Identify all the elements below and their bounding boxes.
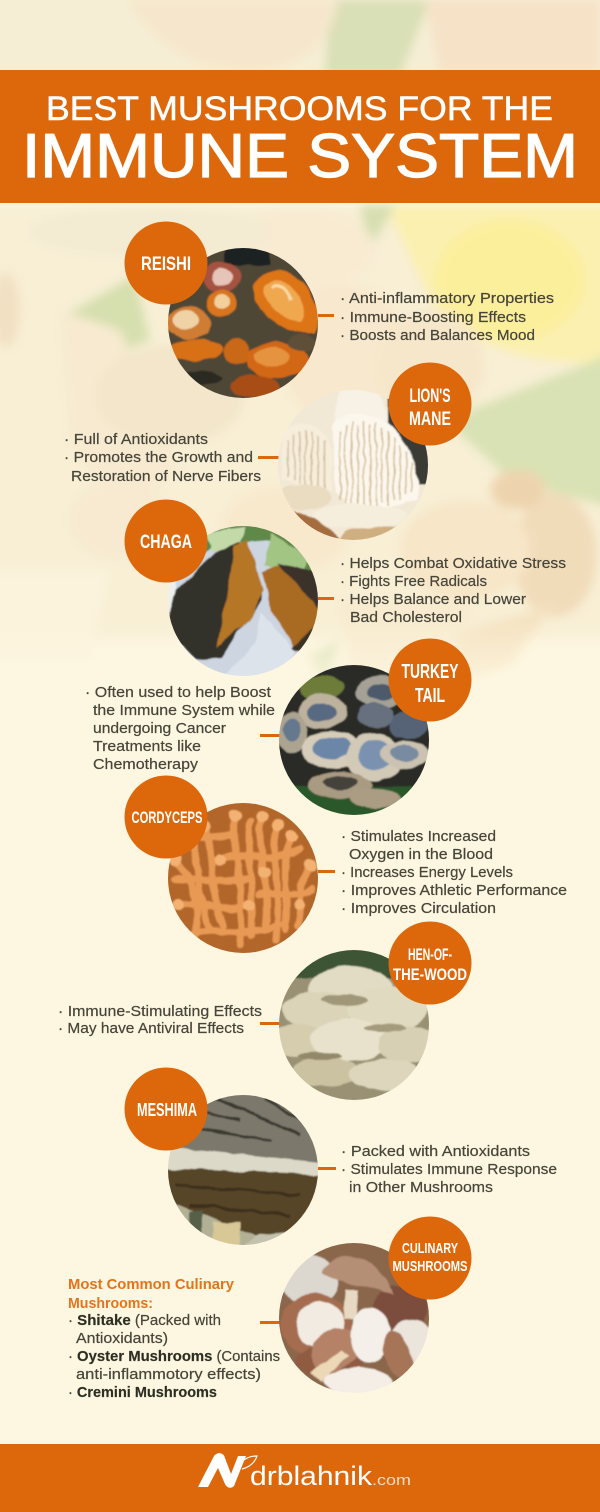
text: Turkey Tail benefits: undergoing Cancer <box>93 721 226 737</box>
photo: chaga <box>168 526 318 676</box>
label badge: Turkey Tail: TAIL <box>415 685 445 707</box>
label badge: Hen-of-the-Wood: HEN-OF- <box>408 945 452 964</box>
text: Meshima benefits: · Stimulates Immune Response <box>341 1162 557 1178</box>
text: Cordyceps benefits: · Increases Energy Levels <box>341 865 513 881</box>
text: Meshima benefits: in Other Mushrooms <box>349 1180 493 1196</box>
text: Reishi benefits <box>340 291 554 344</box>
label badge: Turkey Tail <box>388 638 472 722</box>
label badge: Turkey Tail: TURKEY <box>402 661 459 683</box>
text: culinary mushroom list: Antioxidants) <box>76 1331 168 1347</box>
photo: reishi <box>168 248 318 398</box>
text: Reishi benefits: · Immune-Boosting Effects <box>340 310 526 326</box>
label badge: Cordyceps: CORDYCEPS <box>132 809 202 827</box>
text: culinary mushroom list: · Shitake (Packed with <box>68 1313 221 1329</box>
text: Chaga benefits: · Fights Free Radicals <box>340 574 487 590</box>
label badge: Reishi: REISHI <box>141 254 191 275</box>
logo: drblahnik.com: drblahnik <box>250 1461 373 1491</box>
text: culinary mushroom list <box>68 1277 280 1401</box>
text: culinary mushroom list: Most Common Culinary <box>68 1277 235 1293</box>
text: Chaga benefits: Bad Cholesterol <box>350 610 462 626</box>
text: culinary mushroom list: anti-inflammotory effects) <box>76 1367 261 1383</box>
text: culinary mushroom list: · Cremini Mushrooms <box>68 1385 217 1401</box>
icon: N leaf mark <box>198 1453 257 1488</box>
label badge: Culinary Mushrooms <box>388 1216 472 1300</box>
photo: turkey tail <box>279 665 429 815</box>
text: Cordyceps benefits <box>341 829 567 917</box>
label badge: Hen-of-the-Wood: THE-WOOD <box>393 965 467 984</box>
title line 1: BEST MUSHROOMS FOR THE <box>46 90 553 128</box>
text: Hen-of-the-Wood benefits <box>58 1004 262 1037</box>
text: Turkey Tail benefits: Treatments like <box>93 739 201 755</box>
text: Turkey Tail benefits: Chemotherapy <box>93 757 199 773</box>
label badge: Chaga <box>124 500 208 582</box>
connector lines <box>258 314 336 1324</box>
text: Cordyceps benefits: · Improves Circulation <box>341 901 496 917</box>
label badge: Hen-of-the-Wood <box>388 922 472 1004</box>
text: Lion's Mane benefits: · Promotes the Growth and <box>64 450 253 466</box>
logo: drblahnik.com <box>198 1453 411 1491</box>
label badge: Lion's Mane: LION'S <box>410 385 450 407</box>
text: Turkey Tail benefits <box>85 685 275 773</box>
text: Hen-of-the-Wood benefits: · Immune-Stimulating Effects <box>58 1004 262 1020</box>
text: Lion's Mane benefits: Restoration of Nerve Fibers <box>71 469 261 485</box>
text: Reishi benefits: · Anti-inflammatory Properties <box>340 291 554 307</box>
label badge: Cordyceps <box>124 776 208 858</box>
label badge: Culinary Mushrooms: CULINARY <box>402 1240 458 1257</box>
photo: lion's mane <box>278 390 428 540</box>
text: Chaga benefits: · Helps Balance and Lower <box>340 592 526 608</box>
text: Meshima benefits <box>341 1144 557 1196</box>
text: Cordyceps benefits: · Improves Athletic Performance <box>341 883 567 899</box>
label badge: Reishi <box>124 222 208 304</box>
text: Hen-of-the-Wood benefits: · May have Antiviral Effects <box>58 1021 244 1037</box>
text: Lion's Mane benefits <box>64 432 261 485</box>
text: Lion's Mane benefits: · Full of Antioxidants <box>64 432 208 448</box>
footer bar <box>0 1444 600 1512</box>
label badge: Meshima: MESHIMA <box>137 1100 197 1120</box>
label badge: Culinary Mushrooms: MUSHROOMS <box>392 1258 468 1275</box>
text: Cordyceps benefits: · Stimulates Increased <box>341 829 496 845</box>
label badge: Lion's Mane: MANE <box>409 408 451 430</box>
photo: culinary mushrooms <box>279 1243 429 1390</box>
text: Reishi benefits: · Boosts and Balances Mood <box>340 328 535 344</box>
text: Cordyceps benefits: Oxygen in the Blood <box>349 847 493 863</box>
label badge: Meshima <box>124 1068 208 1150</box>
text: Chaga benefits <box>340 556 566 626</box>
title line 2: IMMUNE SYSTEM <box>22 122 578 191</box>
title banner <box>0 70 600 203</box>
text: Turkey Tail benefits: · Often used to help Boost <box>85 685 271 701</box>
text: Turkey Tail benefits: the Immune System while <box>93 703 275 719</box>
label badge: Lion's Mane <box>388 362 472 446</box>
label badge: Chaga: CHAGA <box>140 531 192 553</box>
photo: hen-of-the-wood <box>279 950 429 1100</box>
logo: drblahnik.com: .com <box>372 1472 411 1489</box>
photo: meshima <box>168 1095 318 1245</box>
text: Chaga benefits: · Helps Combat Oxidative Stress <box>340 556 566 572</box>
photo: cordyceps <box>168 803 318 953</box>
text: culinary mushroom list: · Oyster Mushrooms (Contains <box>68 1349 280 1365</box>
text: Meshima benefits: · Packed with Antioxidants <box>341 1144 530 1160</box>
background: faded mushroom watercolor <box>0 0 600 700</box>
text: culinary mushroom list: Mushrooms: <box>68 1296 153 1312</box>
